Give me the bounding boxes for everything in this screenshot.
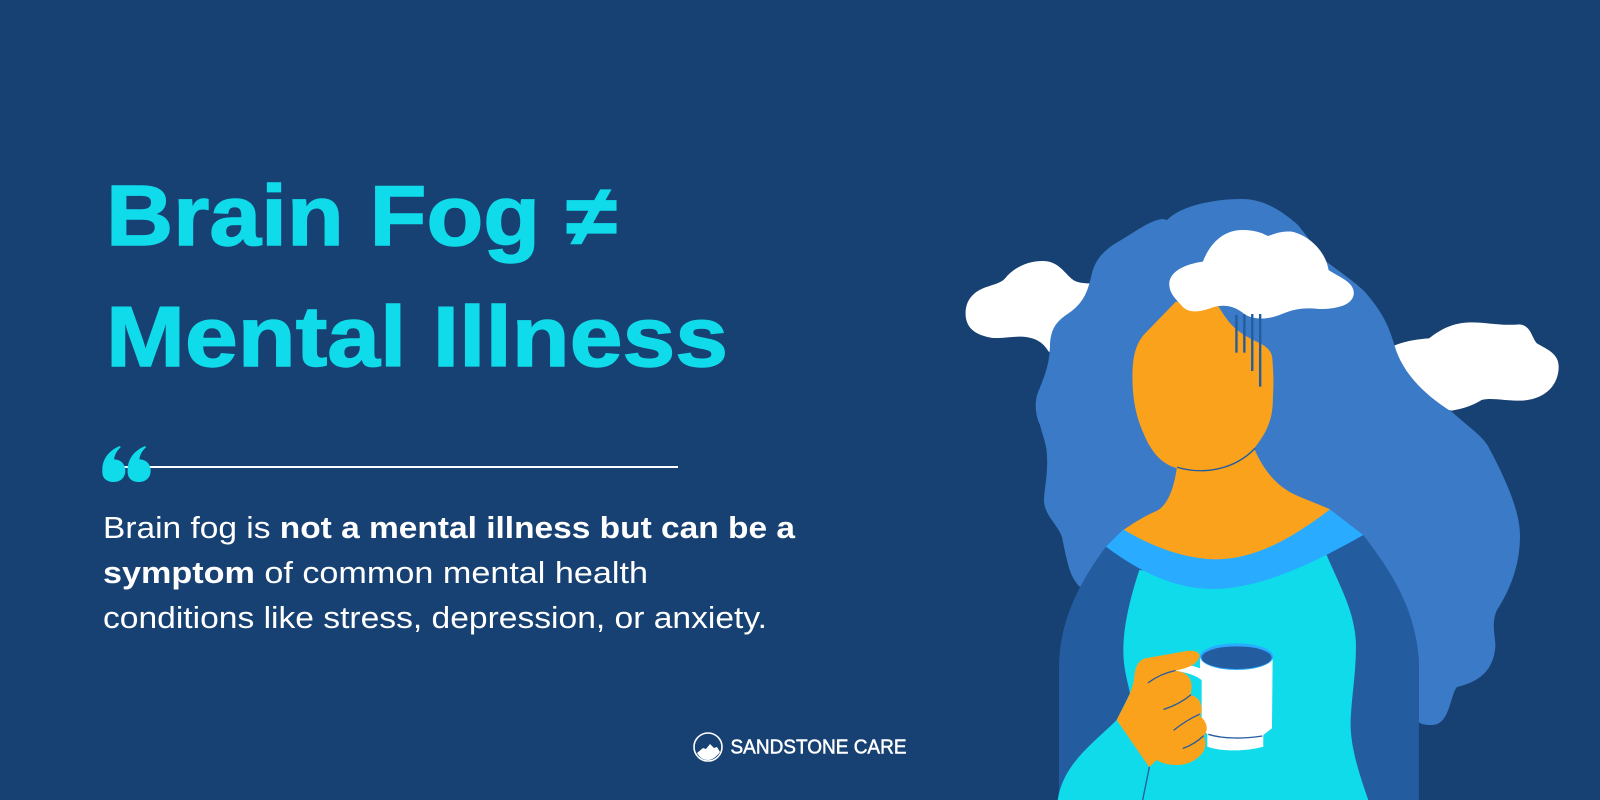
logo: Sandstone Care: SANDSTONE CARE (730, 736, 906, 758)
rain lines (1235, 314, 1261, 387)
illustration: woman with head in clouds (966, 199, 1559, 800)
hand (1117, 651, 1207, 800)
title (106, 169, 728, 385)
title: Brain Fog ≠ (106, 169, 617, 264)
icon: quotation mark with divider line (102, 446, 678, 482)
sleeves (1059, 535, 1419, 800)
body text: Brain fog is not a mental illness but can be a (103, 510, 796, 545)
collar (1106, 509, 1363, 589)
center cloud (1169, 230, 1354, 319)
body text (103, 510, 796, 635)
logo: Sandstone Care (694, 733, 906, 761)
neck (1123, 447, 1330, 577)
body text: conditions like stress, depression, or anxiety. (103, 600, 767, 635)
face (1132, 302, 1273, 471)
body text: symptom of common mental health (103, 555, 648, 590)
sweater body (1058, 555, 1368, 800)
hair (1036, 199, 1520, 725)
mug (1175, 643, 1273, 750)
left cloud (966, 261, 1108, 357)
right cloud (1385, 322, 1559, 411)
title: Mental Illness (106, 290, 728, 385)
chin line (1177, 448, 1255, 471)
